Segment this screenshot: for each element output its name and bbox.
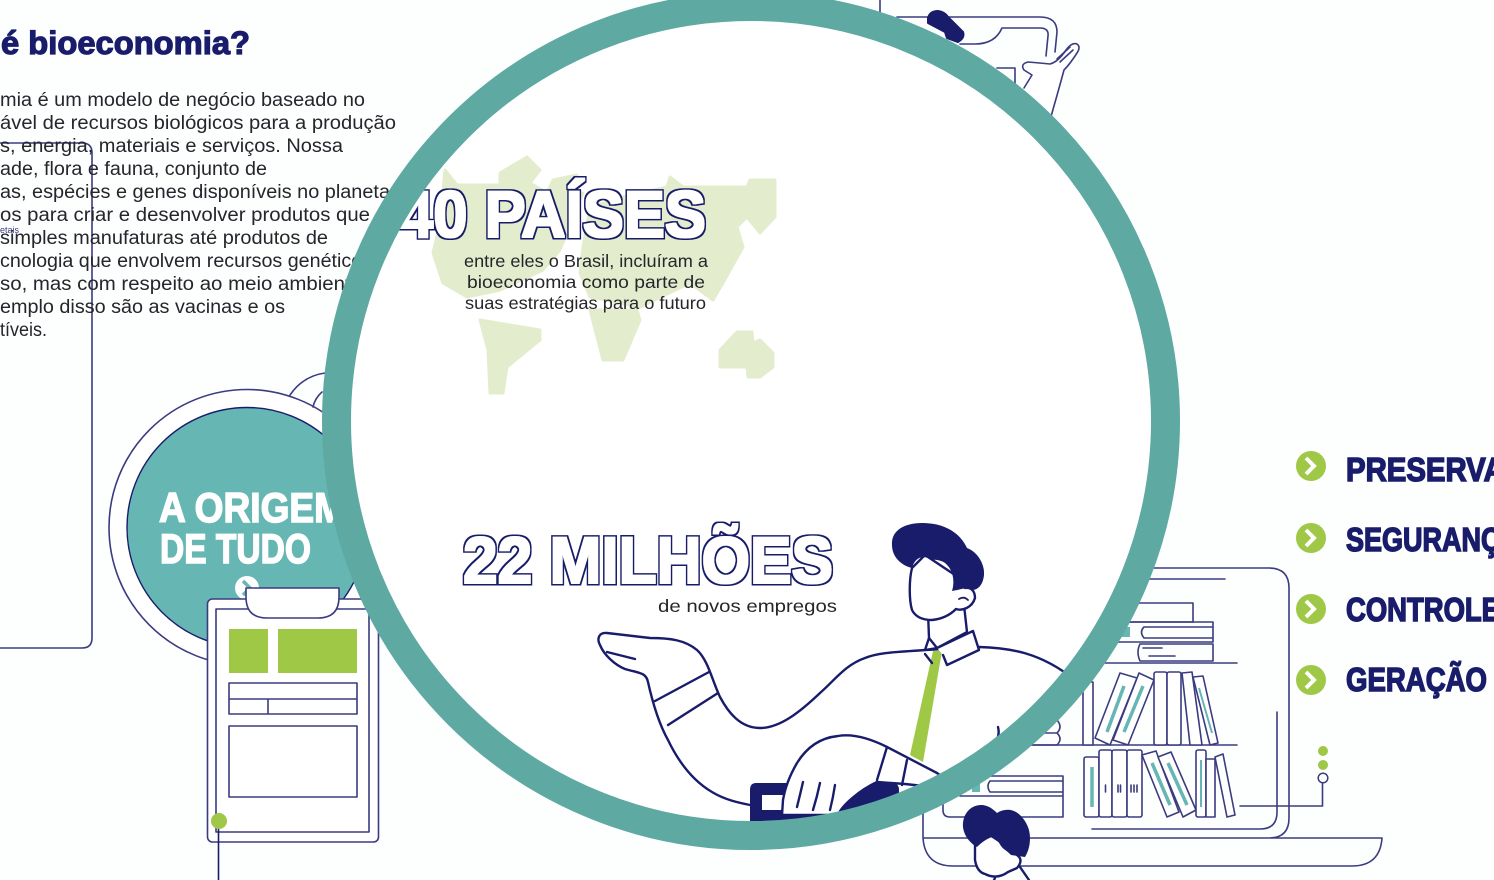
badge title: DE TUDO [160, 525, 311, 572]
badge teal disc [127, 408, 367, 648]
icon: clipboard [208, 588, 378, 880]
sleeve lines [607, 652, 999, 740]
face [910, 555, 975, 620]
collar [937, 631, 979, 665]
shelf lines [1010, 663, 1237, 745]
hand and forearm [781, 734, 940, 814]
stat: 40 países: 40 PAÍSES [399, 177, 706, 251]
text block: bioeconomy definition: s, energia, materiais e serviços. Nossa [0, 136, 343, 157]
body and arm [597, 632, 1064, 806]
ring: central teal circle border [336, 6, 1166, 836]
panel: central circle background [336, 6, 1166, 836]
laptop frame [923, 568, 1382, 866]
lower row of books [1084, 750, 1235, 817]
panel outline: left rounded frame [0, 143, 92, 648]
text block: bioeconomy definition: so, mas com respeito ao meio ambiente [0, 274, 362, 295]
tablet [750, 783, 899, 821]
text block: bioeconomy definition: as, espécies e genes disponíveis no planeta [0, 182, 390, 203]
panel: central circle content [399, 157, 1100, 830]
tie [910, 651, 942, 762]
text block: bioeconomy definition: simples manufaturas até produtos de [0, 228, 328, 249]
hair [892, 523, 984, 591]
badge title [159, 484, 345, 572]
text block: 40 países description [464, 251, 708, 313]
world map [433, 157, 775, 393]
text block: bioeconomy definition: tíveis. [0, 320, 47, 341]
panel: a origem de tudo badge [109, 373, 385, 666]
illustration: person at bottom, below ring [963, 805, 1030, 880]
text block: 40 países description: entre eles o Brasil, incluíram a [464, 251, 708, 271]
text block: 40 países description: suas estratégias para o futuro [465, 293, 706, 313]
text block: bioeconomy definition: cnologia que envolvem recursos genéticos [0, 251, 372, 272]
connector with status dots [1240, 783, 1322, 806]
top book stack [1110, 603, 1213, 661]
heading: what is bioeconomy: é bioeconomia? [1, 25, 250, 61]
neck [928, 605, 967, 648]
illustration: laptop with bookshelf [923, 568, 1382, 866]
text block: bioeconomy definition: ável de recursos biológicos para a produção [0, 113, 396, 134]
illustration: person with raised hand, top right [880, 0, 1079, 120]
badge outer ring [109, 390, 385, 666]
badge top tab [290, 373, 325, 407]
badge title: A ORIGEM [159, 484, 345, 531]
middle row of books [1083, 672, 1218, 745]
stat: 22 milhões: 22 MILHÕES [463, 523, 833, 597]
text block: novos empregos: de novos empregos [658, 596, 837, 616]
bullet list [1296, 451, 1494, 698]
text block: bioeconomy definition: mia é um modelo de negócio baseado no [0, 90, 365, 111]
text block: bioeconomy definition: emplo disso são as vacinas e os [0, 297, 285, 318]
text block: bioeconomy definition: os para criar e desenvolver produtos que [0, 205, 370, 226]
text block: 40 países description: bioeconomia como parte de [467, 272, 705, 292]
left book stacks [943, 720, 1063, 817]
illustration: man with tie and tablet [598, 523, 1100, 830]
small label: etais [0, 225, 20, 235]
badge chevron button [235, 576, 259, 600]
text block: bioeconomy definition: ade, flora e fauna, conjunto de [0, 159, 267, 180]
text block: bioeconomy definition [0, 90, 396, 341]
